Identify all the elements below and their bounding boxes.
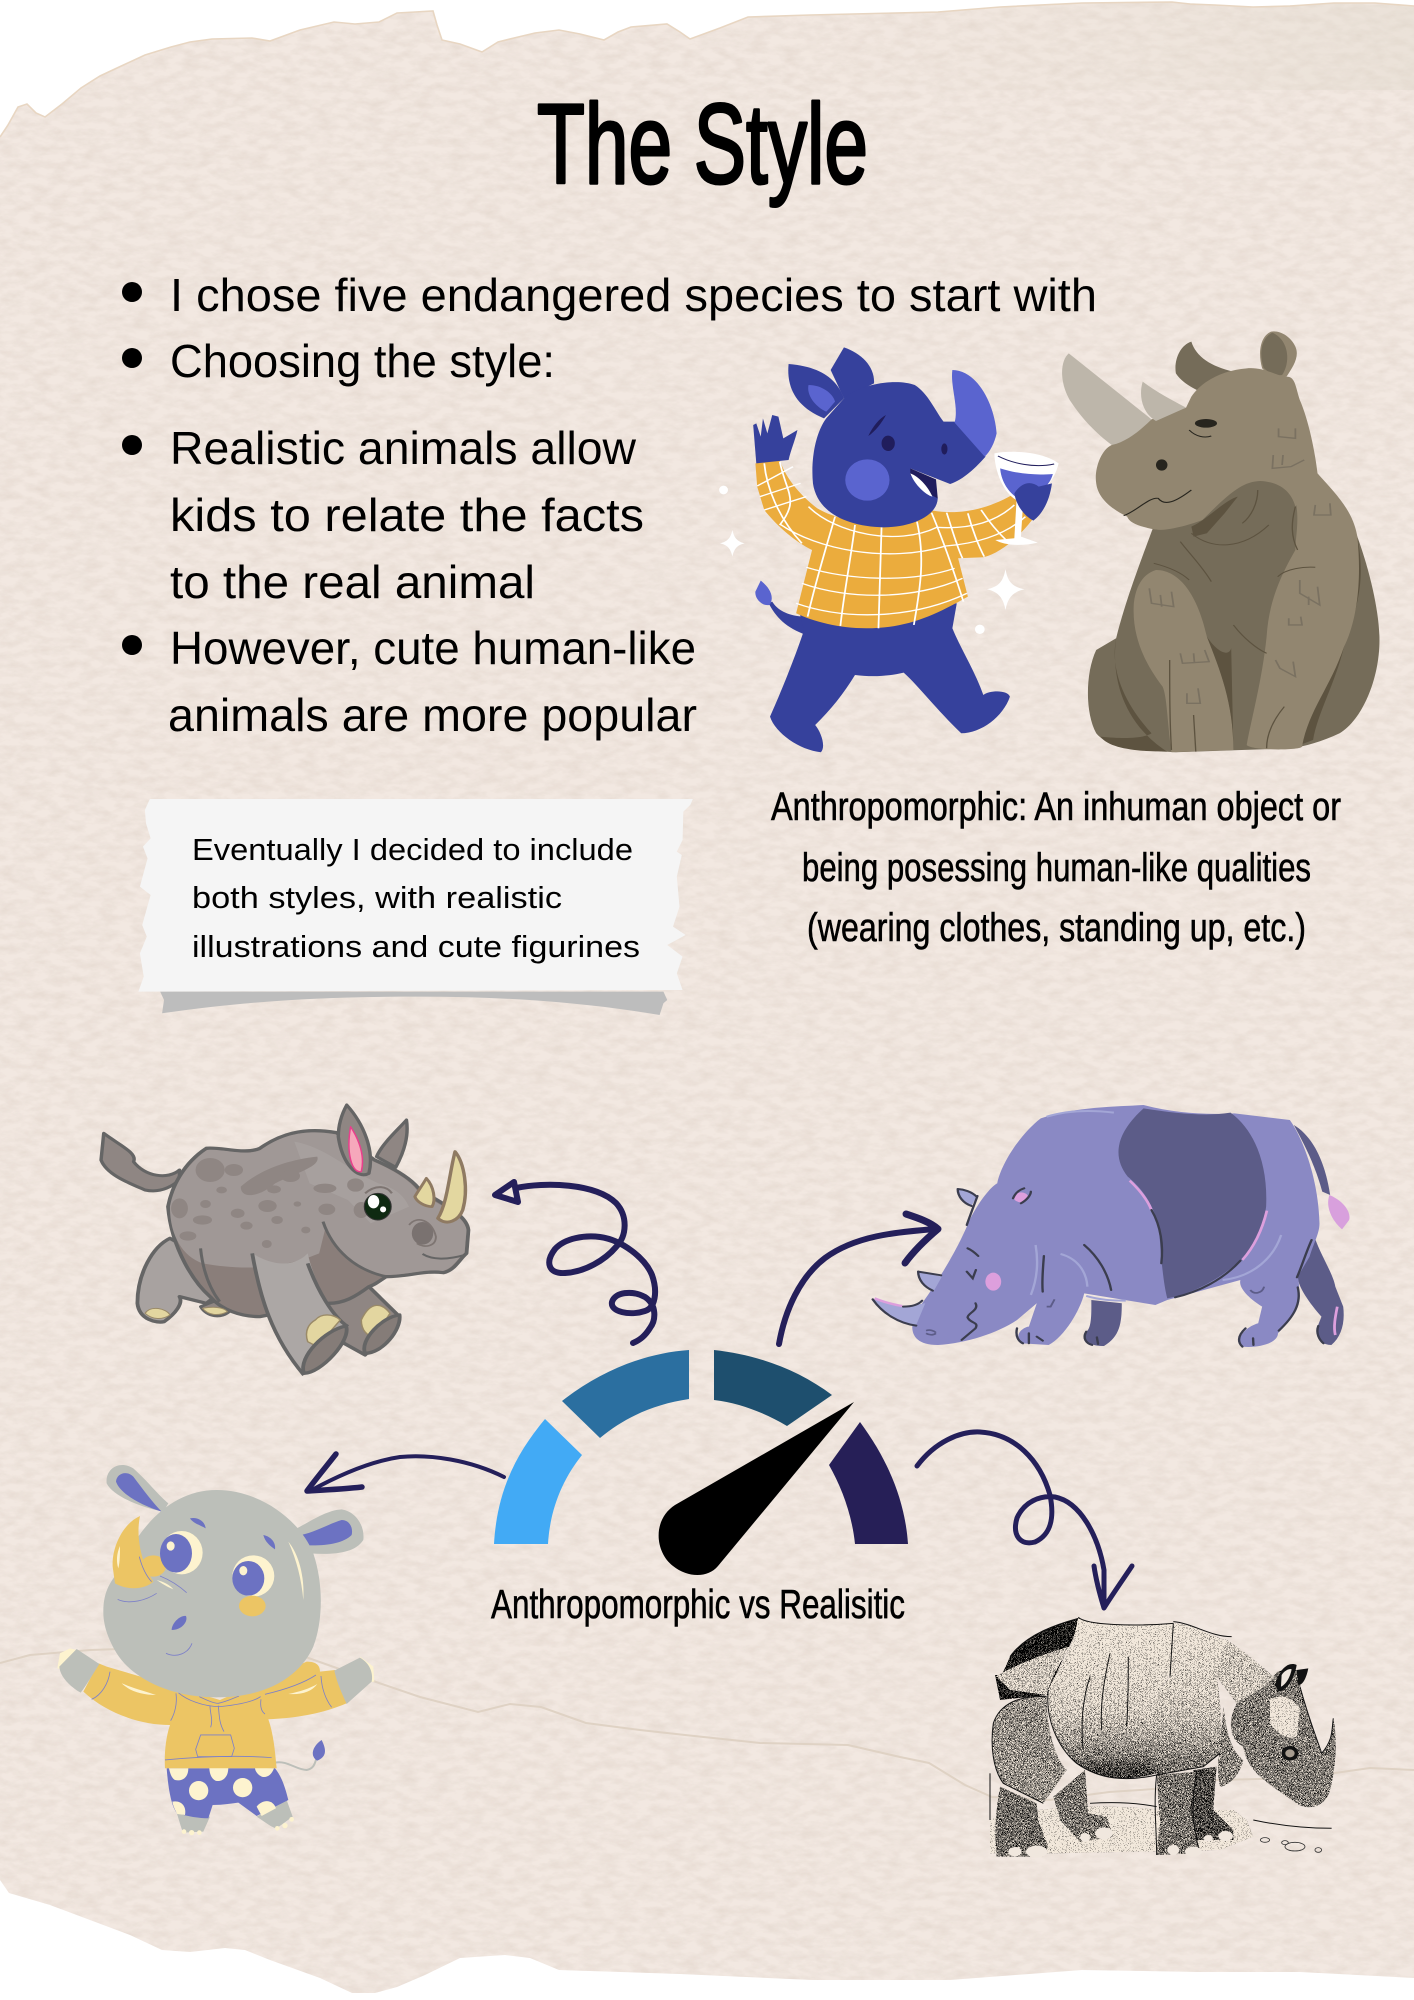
arrow: to purple rhino bbox=[779, 1214, 938, 1344]
bullet: realistic animals: Realistic animals allow bbox=[170, 422, 637, 474]
caption: anthropomorphic definition bbox=[771, 785, 1341, 950]
callout: torn note bbox=[138, 799, 693, 1015]
bullet: realistic animals: kids to relate the facts bbox=[170, 489, 644, 541]
bullet: cute animals: However, cute human-like bbox=[170, 622, 696, 674]
illustration: engraved realistic rhino bbox=[990, 1617, 1336, 1858]
callout: torn note: Eventually I decided to include bbox=[192, 832, 633, 867]
illustration: cute rhino in hoodie bbox=[57, 1465, 374, 1835]
bullet: realistic animals: to the real animal bbox=[170, 556, 535, 608]
callout: torn note: both styles, with realistic bbox=[192, 880, 562, 915]
gauge segment: light blue bbox=[494, 1419, 582, 1544]
title: The Style bbox=[537, 81, 868, 207]
gauge segment: dark purple bbox=[829, 1422, 908, 1544]
bullet: five species: I chose five endangered species to start with bbox=[170, 269, 1097, 321]
arrow: to engraved rhino bbox=[917, 1432, 1132, 1608]
illustration: purple rhino bbox=[873, 1105, 1350, 1347]
illustration: gray cartoon rhino bbox=[101, 1105, 468, 1375]
bullet: cute animals bbox=[122, 622, 697, 741]
illustration: blue rhino in sweater bbox=[719, 347, 1059, 752]
arrow: spiral to gray cartoon rhino bbox=[495, 1182, 655, 1343]
gauge: anthropomorphic to realistic bbox=[494, 1350, 908, 1575]
bullet: realistic animals bbox=[122, 422, 644, 608]
gauge segment: dark teal bbox=[714, 1350, 832, 1426]
bullet list bbox=[122, 269, 1097, 741]
gauge label: Anthropomorphic vs Realisitic bbox=[491, 1581, 905, 1627]
bullet: cute animals: animals are more popular bbox=[168, 689, 697, 741]
callout: torn note: illustrations and cute figurines bbox=[192, 929, 640, 964]
gauge segment: blue bbox=[562, 1350, 689, 1438]
gauge needle bbox=[659, 1402, 854, 1575]
illustration: brown realistic rhino bbox=[1062, 331, 1379, 752]
caption: anthropomorphic definition: (wearing clothes, standing up, etc.) bbox=[807, 906, 1306, 950]
arrow: to cute rhino bbox=[307, 1454, 504, 1491]
bullet: choosing the style: Choosing the style: bbox=[170, 335, 555, 387]
